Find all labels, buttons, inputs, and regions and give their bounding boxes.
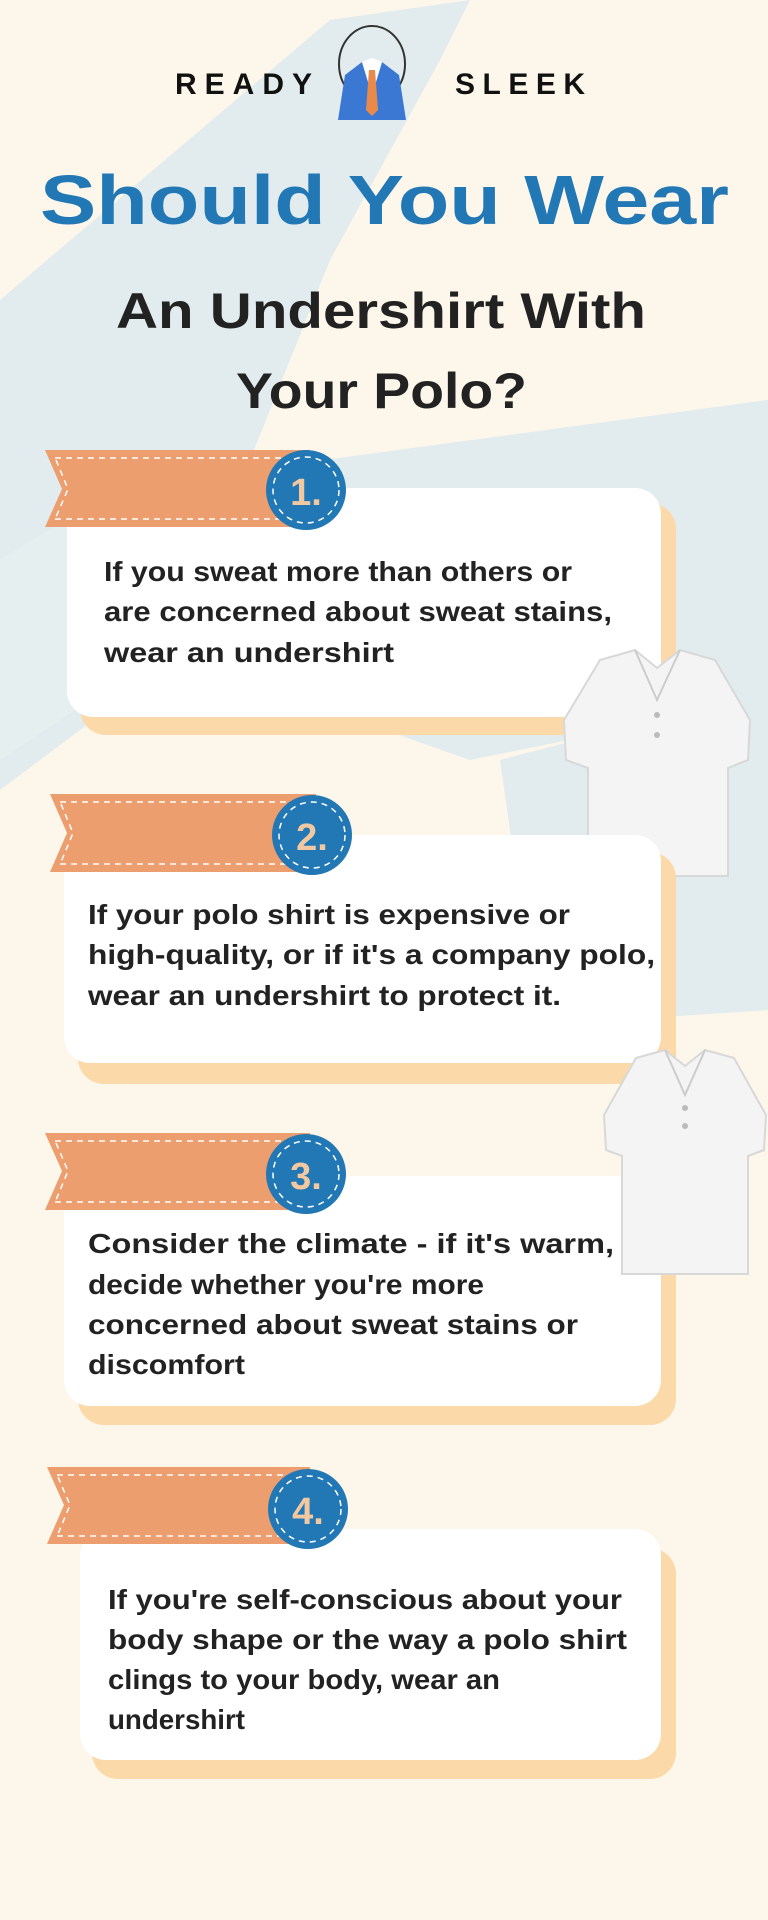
subtitle — [116, 283, 646, 419]
badge 3: 3. — [290, 1156, 322, 1198]
text 1 — [103, 556, 612, 668]
text 2: high-quality, or if it's a company polo, — [88, 939, 655, 970]
text 4: If you're self-conscious about your — [108, 1584, 622, 1615]
text 3: concerned about sweat stains or — [88, 1309, 578, 1340]
text 1: are concerned about sweat stains, — [104, 596, 612, 627]
logo text: READY: READY — [175, 68, 312, 101]
panel: card 3 — [45, 1133, 676, 1425]
badge 4 — [268, 1469, 348, 1549]
panel: card 2 — [50, 794, 676, 1084]
text 4: clings to your body, wear an — [108, 1664, 500, 1695]
text 3 — [88, 1228, 614, 1380]
badge 2: 2. — [296, 817, 328, 859]
panel: card 4 — [47, 1467, 676, 1779]
subtitle: An Undershirt With — [116, 283, 646, 339]
text 4: undershirt — [108, 1704, 245, 1735]
logo text: SLEEK: SLEEK — [455, 68, 585, 101]
text 2 — [87, 899, 655, 1011]
ribbon 4 — [47, 1467, 310, 1544]
icon: polo shirt 1 — [564, 650, 750, 876]
text 3: decide whether you're more — [88, 1269, 484, 1300]
logo — [175, 26, 585, 120]
text 3: Consider the climate - if it's warm, — [88, 1228, 614, 1259]
text 2: wear an undershirt to protect it. — [87, 980, 561, 1011]
icon: suit logo — [338, 26, 406, 120]
badge 2 — [272, 795, 352, 875]
badge 4: 4. — [292, 1491, 324, 1533]
title: Should You Wear — [40, 161, 729, 239]
badge 1: 1. — [290, 472, 322, 514]
subtitle: Your Polo? — [236, 363, 527, 419]
ribbon 3 — [45, 1133, 310, 1210]
text 1: wear an undershirt — [103, 637, 394, 668]
text 4 — [108, 1584, 627, 1735]
icon: polo shirt 2 — [604, 1050, 766, 1274]
badge 3 — [266, 1134, 346, 1214]
text 3: discomfort — [88, 1349, 245, 1380]
text 4: body shape or the way a polo shirt — [108, 1624, 627, 1655]
panel: card 1 — [45, 450, 676, 735]
ribbon 1 — [45, 450, 310, 527]
badge 1 — [266, 450, 346, 530]
ribbon 2 — [50, 794, 316, 872]
text 1: If you sweat more than others or — [104, 556, 572, 587]
text 2: If your polo shirt is expensive or — [88, 899, 570, 930]
